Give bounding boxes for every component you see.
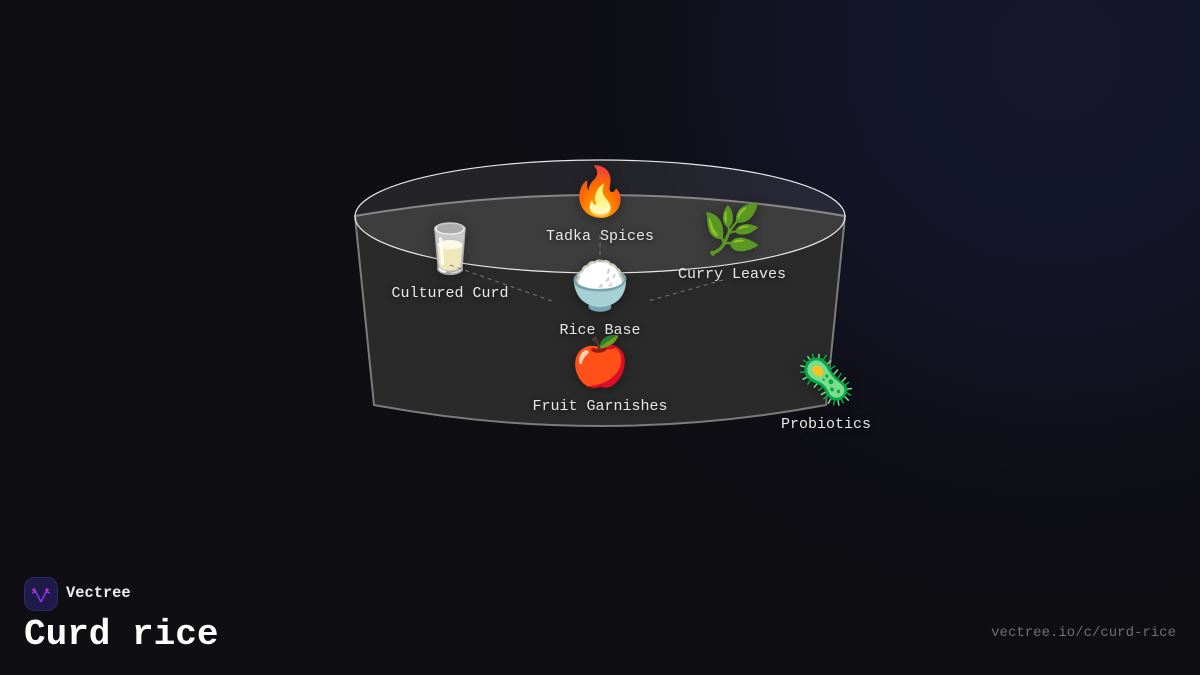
node: Curry Leaves: 🌿 — [702, 201, 762, 258]
node: Tadka Spices: Tadka Spices — [546, 228, 654, 245]
node: Probiotics — [781, 351, 871, 433]
node: Fruit Garnishes: 🍎 — [570, 333, 630, 390]
node: Cultured Curd: Cultured Curd — [391, 285, 509, 302]
node: Cultured Curd: 🥛 — [420, 220, 480, 277]
node: Probiotics: Probiotics — [781, 416, 871, 433]
connector: curry leaves to rice — [648, 280, 723, 301]
node: Fruit Garnishes — [532, 331, 668, 415]
logo icon — [24, 577, 58, 611]
node: Rice Base: 🍚 — [570, 257, 630, 314]
bowl rim ellipse — [355, 160, 845, 273]
source url: vectree.io/c/curd-rice — [991, 625, 1176, 641]
node: Rice Base — [559, 257, 640, 339]
node: Rice Base: Rice Base — [559, 322, 640, 339]
node: Probiotics: 🦠 — [796, 351, 856, 408]
node: Tadka Spices: 🔥 — [570, 163, 630, 220]
bowl body — [355, 195, 845, 426]
brand name: Vectree — [66, 584, 131, 602]
node: Fruit Garnishes: Fruit Garnishes — [532, 398, 668, 415]
connector: curd to rice — [450, 265, 552, 301]
node: Tadka Spices — [546, 163, 654, 245]
node: Curry Leaves: Curry Leaves — [678, 266, 786, 283]
node: Cultured Curd — [391, 220, 509, 302]
connector: tadka to rice — [599, 235, 601, 262]
title: Curd rice — [24, 614, 218, 655]
node: Curry Leaves — [676, 201, 786, 283]
